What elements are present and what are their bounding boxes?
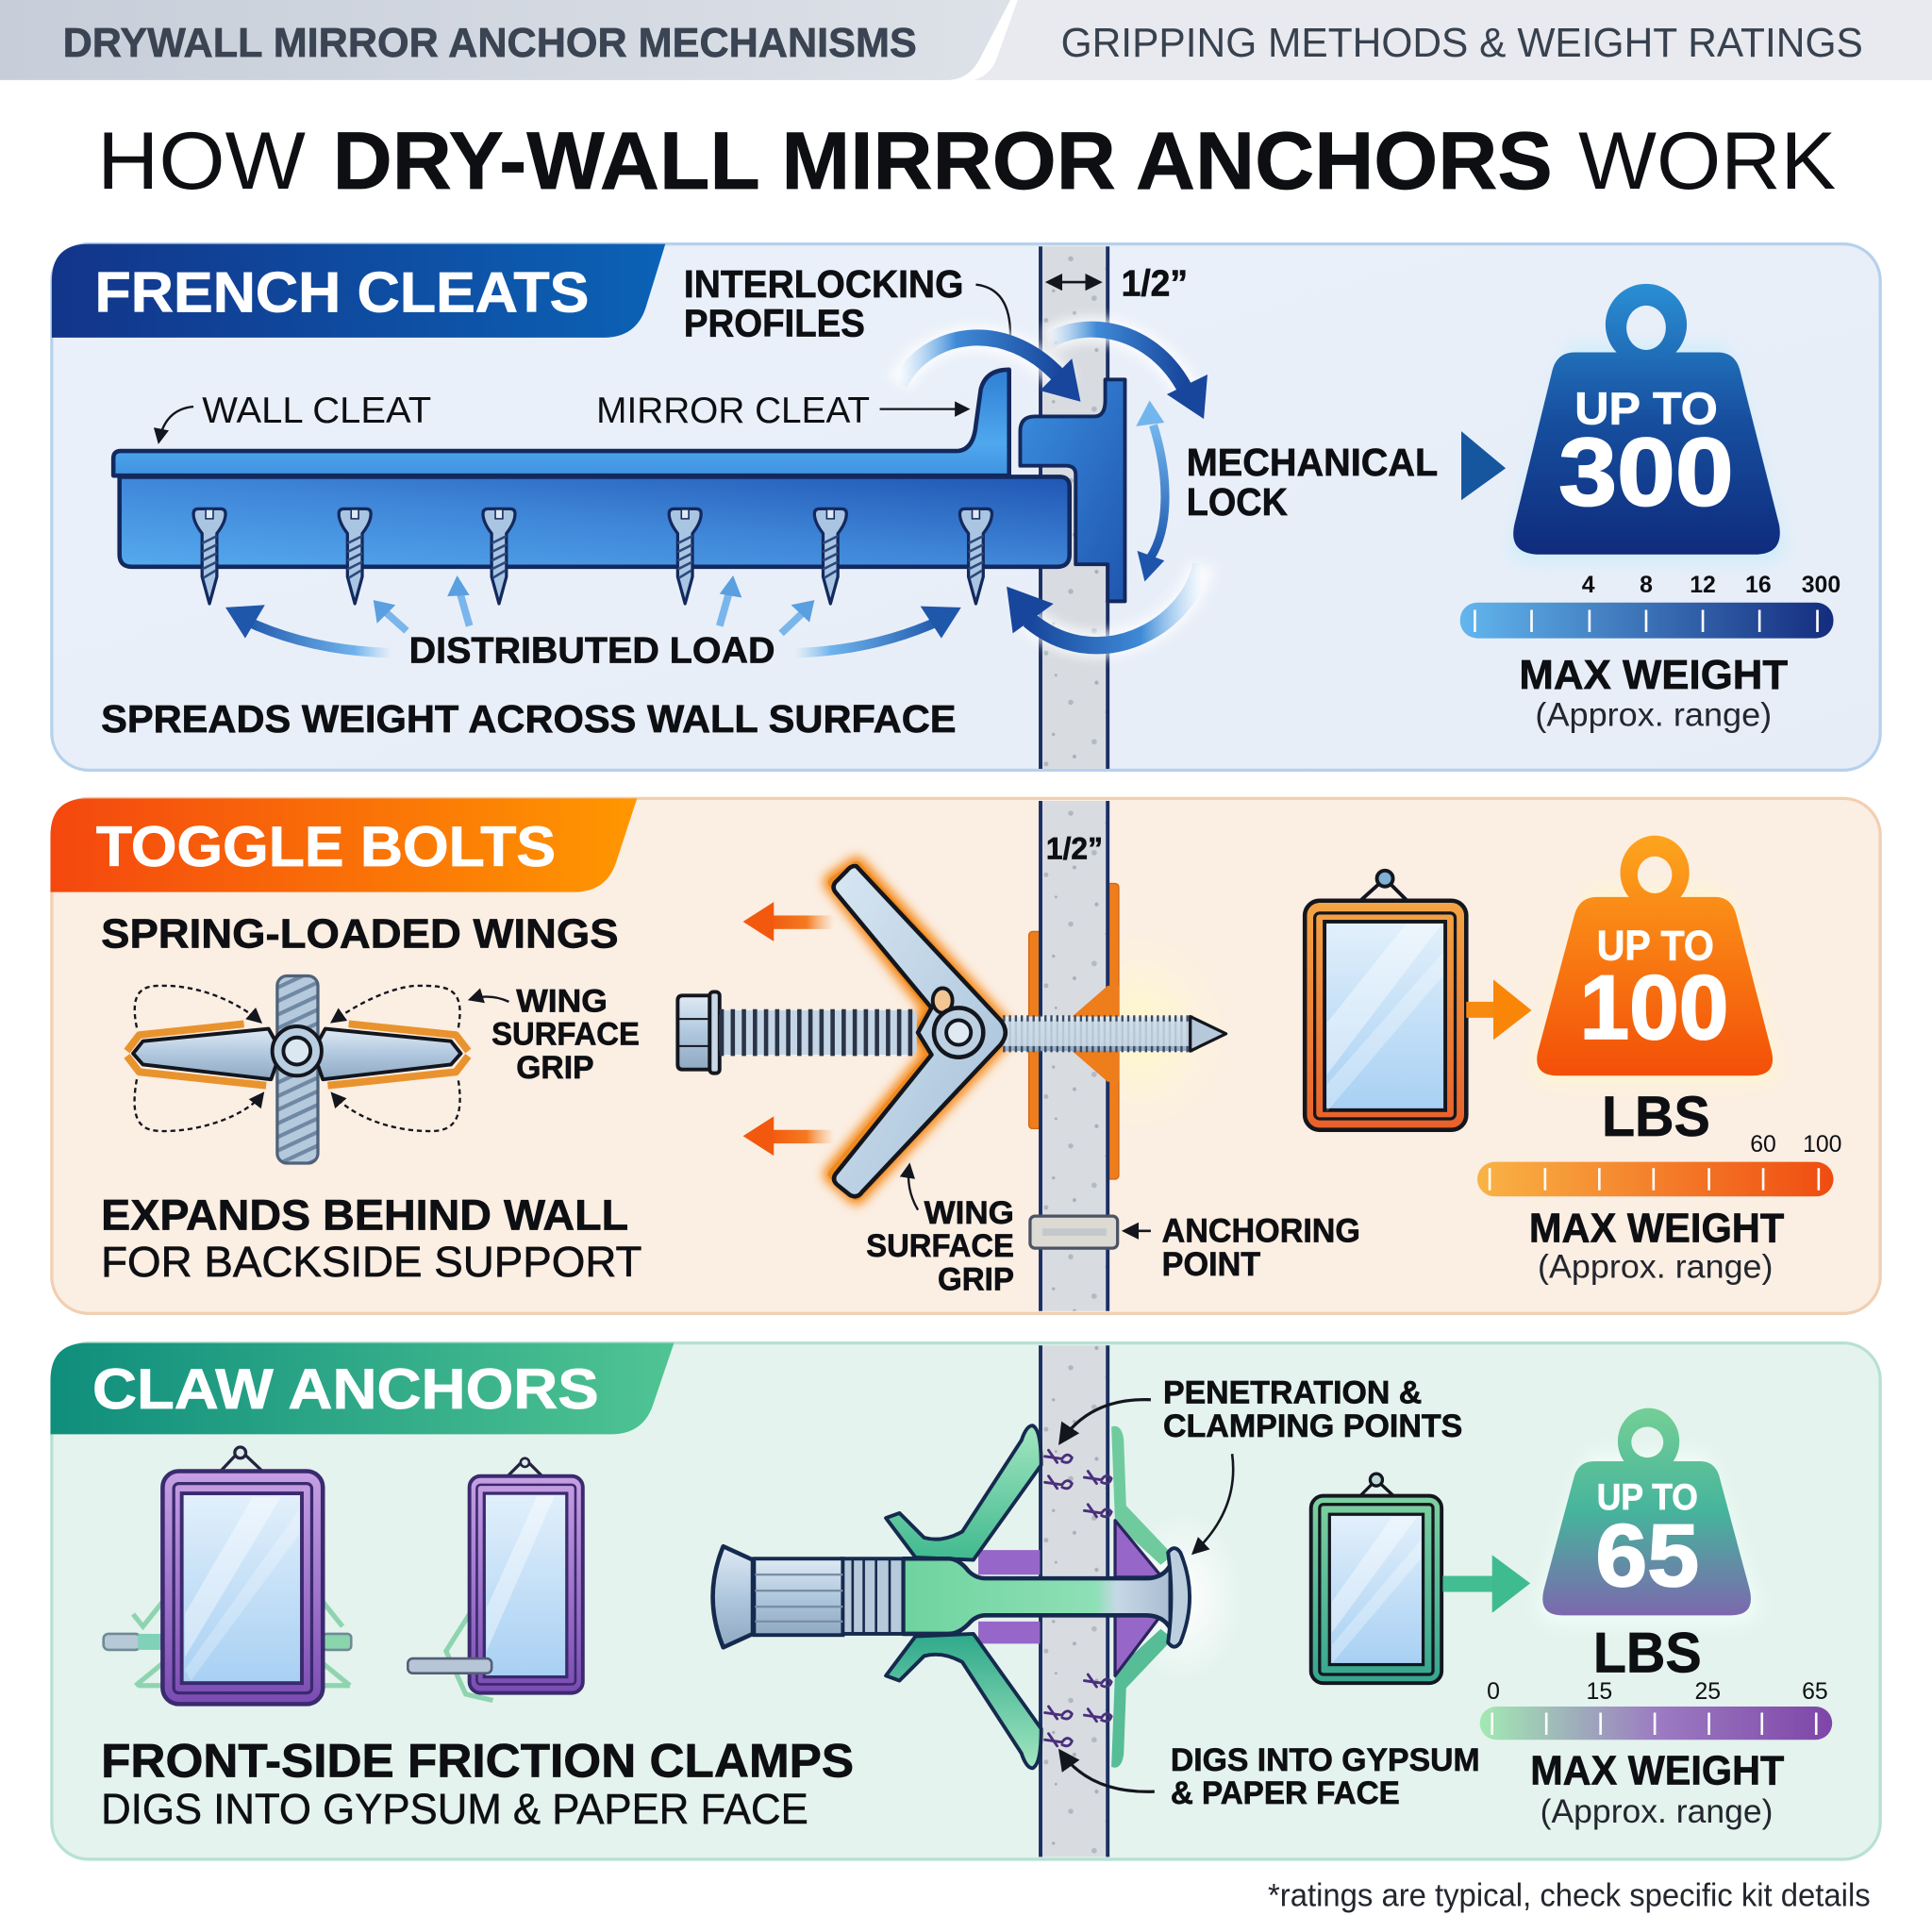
rivet — [933, 989, 953, 1013]
heading tab: french cleats: FRENCH CLEATS — [95, 260, 589, 324]
label: distributed load: DISTRIBUTED LOAD — [409, 631, 775, 672]
mirror: orange frame — [1305, 871, 1466, 1130]
title: DRY-WALL MIRROR ANCHORS — [333, 116, 1553, 207]
title: HOW — [97, 116, 307, 207]
heading tab: claw anchors — [51, 1343, 674, 1434]
pull arrows — [743, 902, 834, 1156]
label: lbs: LBS — [1602, 1085, 1710, 1148]
label: wing surface grip: WING — [516, 983, 608, 1019]
caption: max weight: MAX WEIGHT — [1519, 653, 1788, 698]
caption: max weight: (Approx. range) — [1538, 1248, 1774, 1285]
label: wing surface grip: SURFACE — [491, 1017, 640, 1053]
weight scale: claw anchors — [1480, 1679, 1832, 1740]
footnote: *ratings are typical, check specific kit details — [1268, 1878, 1871, 1914]
label: mechanical lock: LOCK — [1187, 480, 1288, 524]
heading tab: toggle bolts — [51, 798, 637, 892]
mirror cleat top lip and hook — [113, 370, 1009, 475]
distributed load arrows — [225, 575, 961, 653]
arrow to weight — [1442, 1555, 1530, 1613]
heading tab: claw anchors: CLAW ANCHORS — [92, 1357, 599, 1421]
glow behind flange — [1122, 1510, 1244, 1683]
label: wing surface grip: GRIP — [516, 1050, 594, 1086]
panel background — [52, 798, 1880, 1313]
label: 1/2 inch: 1/2” — [1046, 830, 1103, 865]
weight badge: up to 100 — [1534, 836, 1778, 1083]
small anchor — [408, 1658, 491, 1674]
title: WORK — [1578, 116, 1836, 207]
weight badge: up to 100: 100 — [1579, 958, 1728, 1058]
arrow to weight — [1461, 431, 1506, 500]
banner left section — [0, 0, 1010, 80]
weight scale: french cleats: 8 — [1640, 573, 1653, 598]
label: penetration and clamping points: PENETRATION & — [1163, 1375, 1422, 1411]
banner right section: GRIPPING METHODS & WEIGHT RATINGS — [1061, 21, 1863, 66]
flange — [1168, 1548, 1190, 1647]
banner left section: DRYWALL MIRROR ANCHOR MECHANISMS — [63, 21, 917, 66]
label: wing surface grip — [471, 983, 640, 1086]
dashed motion arrows — [135, 986, 460, 1131]
weight badge: up to 65 — [1539, 1408, 1757, 1623]
label: digs into gypsum: DIGS INTO GYPSUM — [1171, 1742, 1480, 1778]
drywall section — [1040, 801, 1108, 1311]
panel: french cleats — [52, 244, 1880, 770]
weight scale: claw anchors: 15 — [1587, 1679, 1612, 1705]
hub — [273, 1026, 322, 1075]
caption: spreads weight: SPREADS WEIGHT ACROSS WALL SURFACE — [101, 697, 957, 741]
caption: max weight — [1519, 653, 1788, 733]
screws — [193, 508, 991, 604]
panel: toggle bolts — [51, 798, 1880, 1313]
label: interlocking profiles: INTERLOCKING — [684, 262, 963, 306]
purple inner arms — [978, 1521, 1162, 1675]
weight scale: claw anchors: 25 — [1694, 1679, 1721, 1705]
subheading: spring-loaded wings: SPRING-LOADED WINGS — [101, 911, 619, 957]
caption: max weight: MAX WEIGHT — [1530, 1748, 1784, 1793]
label: wing surface grip lower: WING — [924, 1195, 1014, 1231]
anchoring clip — [1030, 1216, 1118, 1248]
top banner — [0, 0, 1932, 80]
french cleat assembly — [113, 370, 1124, 601]
label: lbs: LBS — [1593, 1621, 1702, 1684]
label: interlocking profiles — [684, 262, 1010, 345]
label: penetration and clamping points — [1061, 1375, 1462, 1553]
mirror: purple large with anchors — [104, 1447, 351, 1704]
caption: max weight — [1530, 1748, 1784, 1830]
small toggle mechanism — [127, 975, 468, 1163]
mirror: green frame — [1311, 1474, 1441, 1683]
ribbed collar — [841, 1558, 903, 1634]
threaded rod right — [1003, 1017, 1192, 1051]
drywall section — [1040, 246, 1108, 769]
orange flare at bolt exit — [1071, 986, 1119, 1082]
label: wall cleat: WALL CLEAT — [202, 391, 431, 431]
caption: front-side friction clamps: DIGS INTO GYPSUM & PAPER FACE — [101, 1785, 808, 1833]
banner right section — [974, 0, 1932, 80]
bolt head — [677, 995, 709, 1070]
weight badge: up to 300: UP TO — [1574, 383, 1718, 434]
caption: max weight: MAX WEIGHT — [1529, 1207, 1784, 1252]
claw points biting into wall — [1045, 1450, 1111, 1746]
label: interlocking profiles: PROFILES — [684, 302, 865, 345]
label: wing surface grip lower — [866, 1166, 1014, 1298]
weight scale: french cleats: 16 — [1745, 573, 1772, 598]
glow — [833, 866, 1008, 1195]
label: wing surface grip lower: GRIP — [938, 1262, 1014, 1298]
panel background — [52, 1343, 1880, 1859]
weight scale: claw anchors: 0 — [1487, 1679, 1500, 1705]
mechanical lock arrows — [899, 329, 1208, 645]
weight scale: french cleats: 300 — [1802, 573, 1840, 598]
weight badge: up to 100: UP TO — [1597, 923, 1714, 969]
label: 1/2 inch thickness: 1/2” — [1122, 263, 1188, 304]
weight scale: toggle bolts — [1477, 1132, 1841, 1196]
small anchor right — [323, 1602, 351, 1686]
label: penetration and clamping points: CLAMPING POINTS — [1163, 1408, 1462, 1444]
caption: expands behind wall — [101, 1191, 641, 1286]
screw head — [713, 1546, 753, 1647]
heading tab: french cleats — [52, 244, 665, 338]
right wing — [327, 1024, 468, 1086]
caption: expands behind wall: FOR BACKSIDE SUPPORT — [101, 1238, 641, 1286]
wings — [834, 866, 1006, 1196]
weight scale: toggle bolts: 100 — [1803, 1132, 1841, 1158]
caption: max weight: (Approx. range) — [1541, 1793, 1774, 1830]
weight badge: up to 65: 65 — [1595, 1506, 1699, 1605]
weight badge: up to 300: 300 — [1558, 419, 1734, 526]
green wings left — [886, 1425, 1041, 1560]
label: anchoring point — [1124, 1213, 1360, 1283]
drywall section — [1040, 1345, 1108, 1857]
small anchor left — [104, 1602, 162, 1686]
weight badge: up to 65: UP TO — [1597, 1477, 1698, 1518]
label: mirror cleat: MIRROR CLEAT — [596, 391, 870, 431]
weight scale: claw anchors: 65 — [1802, 1679, 1828, 1705]
mirror: purple narrow with anchor — [408, 1458, 583, 1700]
panel: claw anchors — [51, 1343, 1880, 1859]
knurled grip — [754, 1558, 842, 1635]
shaft — [903, 1558, 1171, 1634]
label: mechanical lock — [1187, 441, 1438, 524]
arrow to weight — [1466, 979, 1532, 1040]
label: anchoring point: POINT — [1162, 1246, 1261, 1283]
weight scale: toggle bolts: 60 — [1750, 1132, 1776, 1158]
label: digs into gypsum: & PAPER FACE — [1171, 1775, 1400, 1811]
label: wing surface grip lower: SURFACE — [866, 1228, 1014, 1264]
label: anchoring point: ANCHORING — [1162, 1213, 1360, 1250]
caption: front-side friction clamps — [101, 1734, 854, 1833]
large toggle bolt — [677, 866, 1226, 1196]
large claw anchor — [713, 1425, 1190, 1768]
left wing — [127, 1024, 266, 1086]
threaded bolt — [277, 975, 318, 1163]
weight scale: french cleats: 12 — [1690, 573, 1716, 598]
label: digs into gypsum — [1061, 1742, 1480, 1811]
weight scale: french cleats: 4 — [1582, 573, 1595, 598]
glow behind bolt tip — [1047, 928, 1232, 1138]
orange backing plates — [1029, 883, 1119, 1179]
green wings right — [1111, 1426, 1173, 1565]
label: wall cleat — [158, 391, 431, 441]
wall-mounted cleat — [1020, 379, 1124, 601]
heading tab: toggle bolts: TOGGLE BOLTS — [96, 815, 556, 878]
weight scale: french cleats — [1460, 573, 1840, 639]
weight badge: up to 300 — [1510, 284, 1786, 562]
caption: front-side friction clamps: FRONT-SIDE FRICTION CLAMPS — [101, 1734, 854, 1787]
label: mechanical lock: MECHANICAL — [1187, 441, 1438, 484]
caption: max weight — [1529, 1207, 1784, 1285]
caption: max weight: (Approx. range) — [1535, 696, 1772, 733]
threaded rod left — [720, 1010, 917, 1055]
mirror cleat lower body — [120, 476, 1070, 567]
panel background — [52, 244, 1880, 770]
hub — [934, 1008, 983, 1058]
caption: expands behind wall: EXPANDS BEHIND WALL — [101, 1191, 628, 1240]
